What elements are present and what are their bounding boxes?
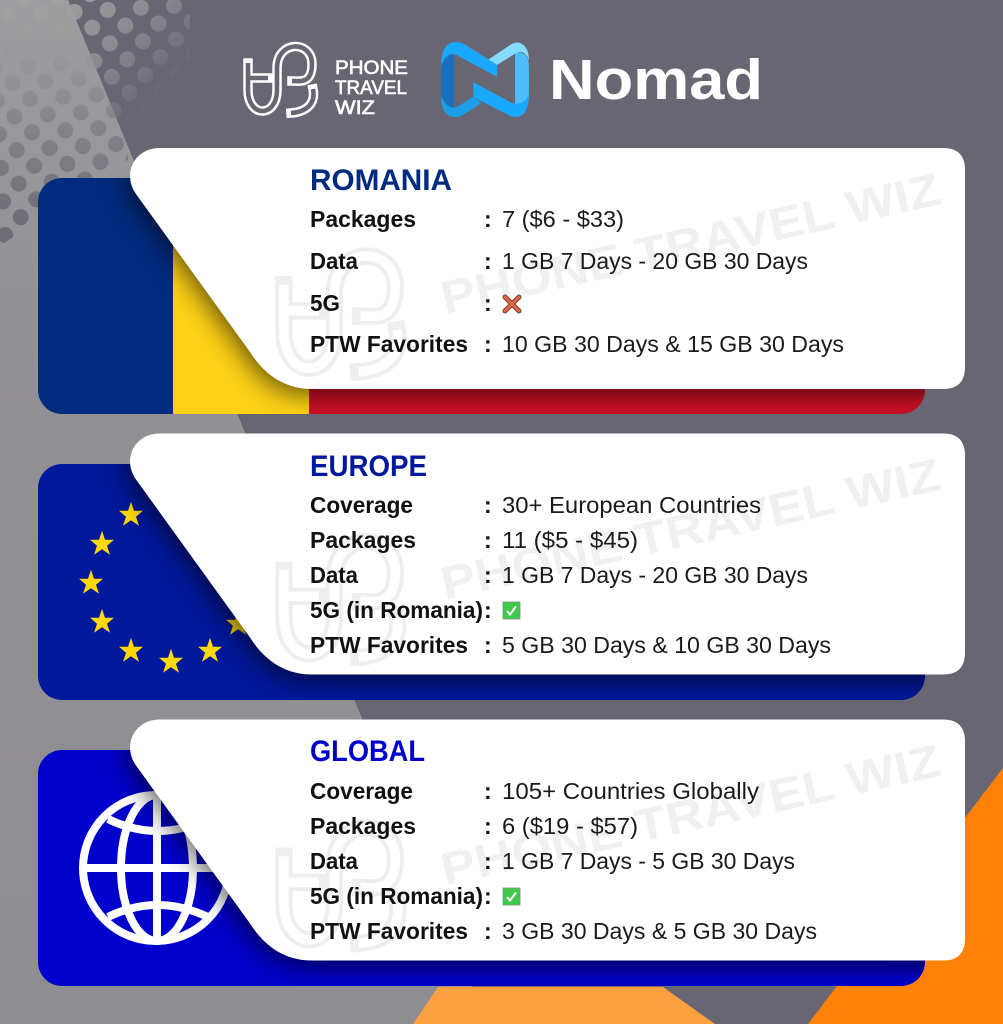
row: 5G: : [484,290,492,316]
watermark: Europe card: PHONE TRAVEL WIZ [436,448,945,609]
logo: Nomad wordmark: Nomad [549,48,763,112]
card: Europe details [130,434,965,674]
row: data [310,562,808,588]
row: packages: 7 ($6 - $33) [502,206,624,232]
row: PTW favorites: : [484,331,492,357]
row: coverage [310,492,761,518]
watermark: Global card: PHONE TRAVEL WIZ [436,734,945,895]
icon: cross mark [505,297,519,311]
logo: Phone Travel Wiz wordmark: WIZ [335,98,375,119]
row: 5G in Romania: 5G (in Romania) [310,883,483,909]
row: data: : [484,562,492,588]
row: packages: Packages [310,206,416,232]
row: data: 1 GB 7 Days - 20 GB 30 Days [502,248,808,274]
row: packages: : [484,206,492,232]
header logos [248,42,763,119]
row: packages [310,813,638,839]
background: light orange shape [413,987,715,1024]
watermark: Europe card [284,448,945,657]
flag: global blue [38,750,925,986]
icon: globe [83,795,229,941]
watermark: Romania card [284,163,945,372]
card: Global details [130,720,965,960]
row: data: Data [310,562,358,588]
watermark: Romania card: PHONE TRAVEL WIZ [436,163,945,324]
row: coverage: 30+ European Countries [502,492,761,518]
row: 5G in Romania: : [484,597,492,623]
row: data [310,848,795,874]
row: PTW favorites: PTW Favorites [310,918,468,944]
logo: Phone Travel Wiz wordmark: PHONE [335,58,408,79]
row: data: 1 GB 7 Days - 20 GB 30 Days [502,562,808,588]
logo: Phone Travel Wiz mark [248,46,313,113]
background: halftone dots [0,0,190,243]
row: PTW favorites: 5 GB 30 Days & 10 GB 30 Days [502,632,831,658]
row: coverage: Coverage [310,492,413,518]
row: PTW favorites [310,918,817,944]
panel: Global [38,720,965,986]
background: gray diagonal shape [0,0,487,1024]
row: packages: Packages [310,813,416,839]
row: PTW favorites: 10 GB 30 Days & 15 GB 30 Days [502,331,844,357]
row: packages [310,206,624,232]
panel: Romania [38,148,965,414]
row: 5G: 5G [310,290,340,316]
row: packages [310,527,638,553]
row: packages: : [484,813,492,839]
row: packages: 11 ($5 - $45) [502,527,638,553]
logo: Phone Travel Wiz wordmark: TRAVEL [335,78,407,99]
row: PTW favorites [310,331,844,357]
heading: Europe: EUROPE [310,450,427,483]
logo: Nomad icon [441,42,529,117]
row: coverage: : [484,492,492,518]
flag: European Union [38,464,925,700]
background: orange shape [808,768,1003,1024]
row: data: : [484,248,492,274]
row: 5G [310,290,519,316]
card: Romania details [130,148,965,389]
row: packages: 6 ($19 - $57) [502,813,638,839]
row: coverage: : [484,778,492,804]
icon: EU stars [79,502,250,673]
row: PTW favorites: PTW Favorites [310,632,468,658]
flag: Romania [38,178,925,414]
row: 5G in Romania: 5G (in Romania) [310,597,483,623]
row: packages: : [484,527,492,553]
row: data [310,248,808,274]
logo: Phone Travel Wiz wordmark [335,58,408,119]
row: data: Data [310,248,358,274]
panel: Europe [38,434,965,700]
row: 5G in Romania: : [484,883,492,909]
heading: Global: GLOBAL [310,735,425,768]
icon: check mark [503,602,520,619]
row: data: Data [310,848,358,874]
row: PTW favorites: PTW Favorites [310,331,468,357]
icon: check mark [503,888,520,905]
row: PTW favorites: 3 GB 30 Days & 5 GB 30 Days [502,918,817,944]
watermark: Global card [284,734,945,943]
row: PTW favorites: : [484,918,492,944]
row: coverage: Coverage [310,778,413,804]
row: coverage: 105+ Countries Globally [502,778,760,804]
row: data: : [484,848,492,874]
heading: Romania: ROMANIA [310,164,452,197]
row: data: 1 GB 7 Days - 5 GB 30 Days [502,848,795,874]
row: PTW favorites [310,632,831,658]
row: packages: Packages [310,527,416,553]
row: PTW favorites: : [484,632,492,658]
row: coverage [310,778,760,804]
